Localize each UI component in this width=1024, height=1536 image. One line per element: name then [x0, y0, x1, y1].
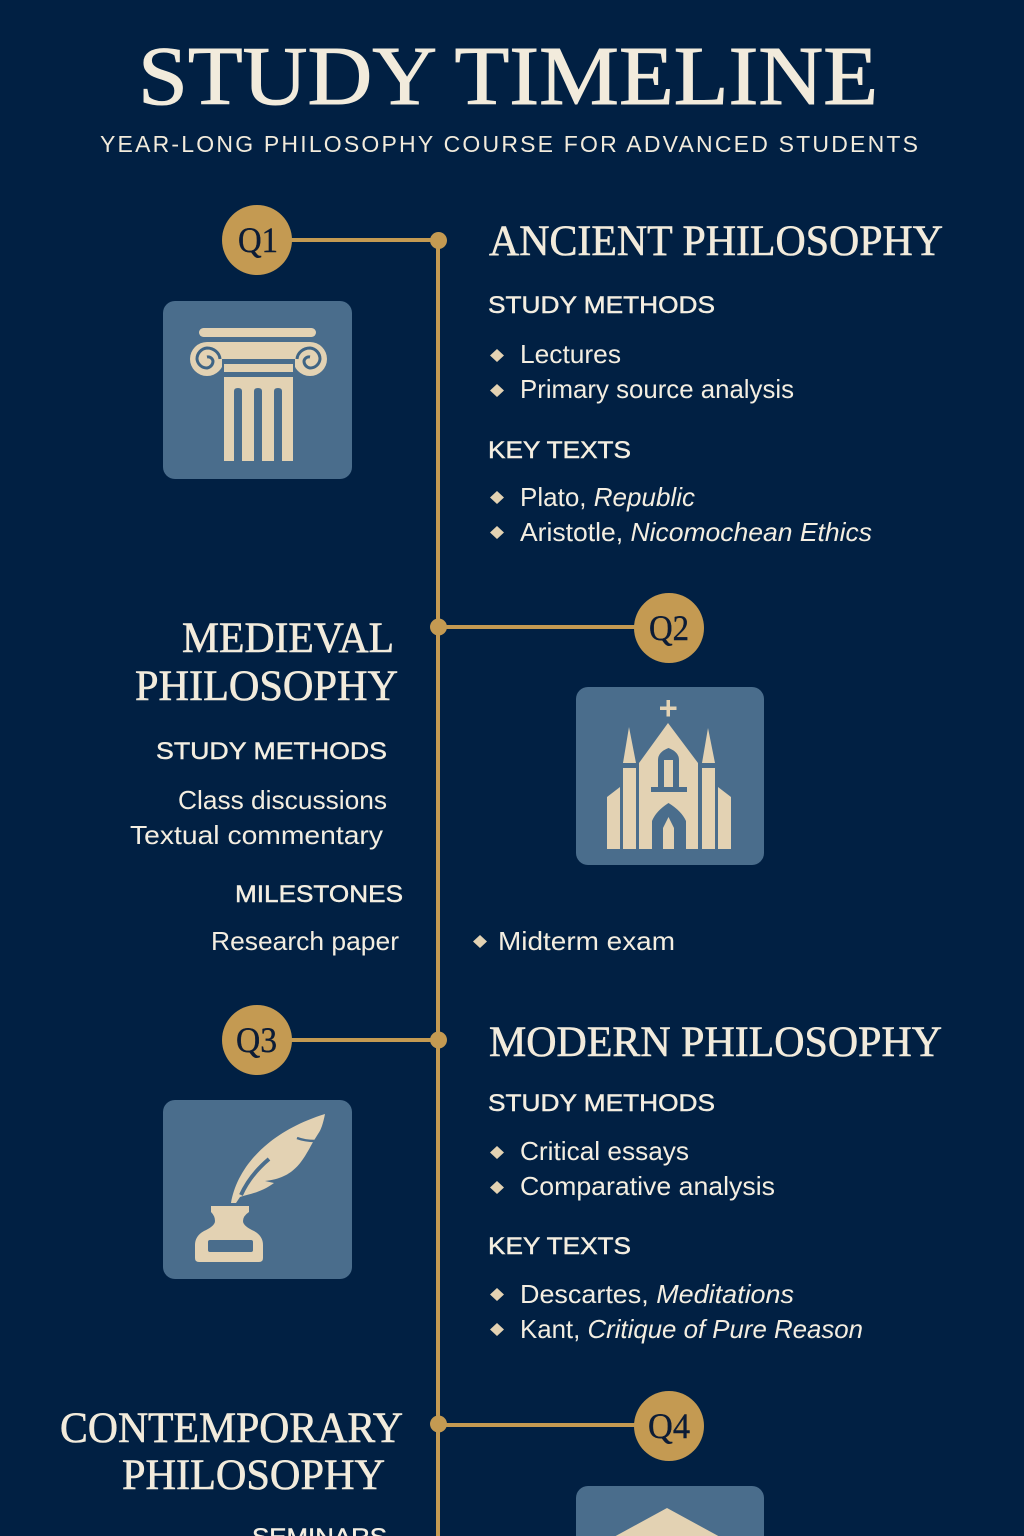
icon: ionic column — [163, 301, 352, 479]
list item: Research paper — [211, 926, 399, 956]
heading line two: PHILOSOPHY — [122, 1452, 385, 1499]
subheading: study methods: STUDY METHODS — [488, 292, 715, 319]
panel: medieval philosophy — [130, 615, 403, 956]
heading line two: PHILOSOPHY — [135, 663, 398, 710]
Q2 marker: Q2 — [649, 608, 689, 648]
heading: modern philosophy: MODERN PHILOSOPHY — [489, 1019, 942, 1066]
list item: Descartes, Meditations — [520, 1279, 794, 1309]
Q3 marker — [222, 1005, 447, 1075]
timeline spine — [436, 240, 440, 1536]
list item: Textual commentary — [130, 820, 383, 850]
subtitle: YEAR-LONG PHILOSOPHY COURSE FOR ADVANCED STUDENTS — [100, 131, 918, 157]
icon: quill and inkwell — [163, 1100, 352, 1279]
subheading: milestones: MILESTONES — [235, 881, 403, 908]
list item: Kant, Critique of Pure Reason — [520, 1314, 863, 1344]
bullet markers — [490, 349, 504, 539]
Q4 marker — [430, 1391, 704, 1461]
heading: contemporary philosophy: CONTEMPORARY — [60, 1405, 403, 1452]
subheading: key texts: KEY TEXTS — [488, 1233, 631, 1260]
icon: cathedral — [576, 687, 764, 865]
subheading: study methods: STUDY METHODS — [488, 1090, 715, 1117]
bullet markers — [490, 1146, 504, 1336]
title: STUDY TIMELINE — [138, 30, 878, 123]
list item: Critical essays — [520, 1136, 689, 1166]
Q1 marker — [222, 205, 447, 275]
Q4 marker: Q4 — [648, 1406, 690, 1446]
heading: medieval philosophy: MEDIEVAL — [182, 615, 394, 662]
milestone: midterm exam: Midterm exam — [498, 926, 675, 956]
panel: contemporary philosophy — [60, 1405, 403, 1536]
list item: Comparative analysis — [520, 1171, 775, 1201]
Q3 marker: Q3 — [236, 1020, 277, 1060]
Q2 marker — [430, 593, 704, 663]
subheading: key texts: KEY TEXTS — [488, 437, 631, 464]
list item: Plato, Republic — [520, 482, 695, 512]
list item: Primary source analysis — [520, 374, 794, 404]
panel: ancient philosophy — [488, 218, 943, 547]
Q1 marker: Q1 — [238, 220, 278, 260]
heading: ancient philosophy: ANCIENT PHILOSOPHY — [489, 218, 943, 265]
list item: Class discussions — [178, 785, 387, 815]
subheading: study methods: STUDY METHODS — [156, 738, 387, 765]
panel: modern philosophy — [488, 1019, 942, 1344]
icon: contemporary building — [576, 1486, 764, 1536]
list item: Aristotle, Nicomochean Ethics — [520, 517, 872, 547]
list item: Lectures — [520, 339, 621, 369]
